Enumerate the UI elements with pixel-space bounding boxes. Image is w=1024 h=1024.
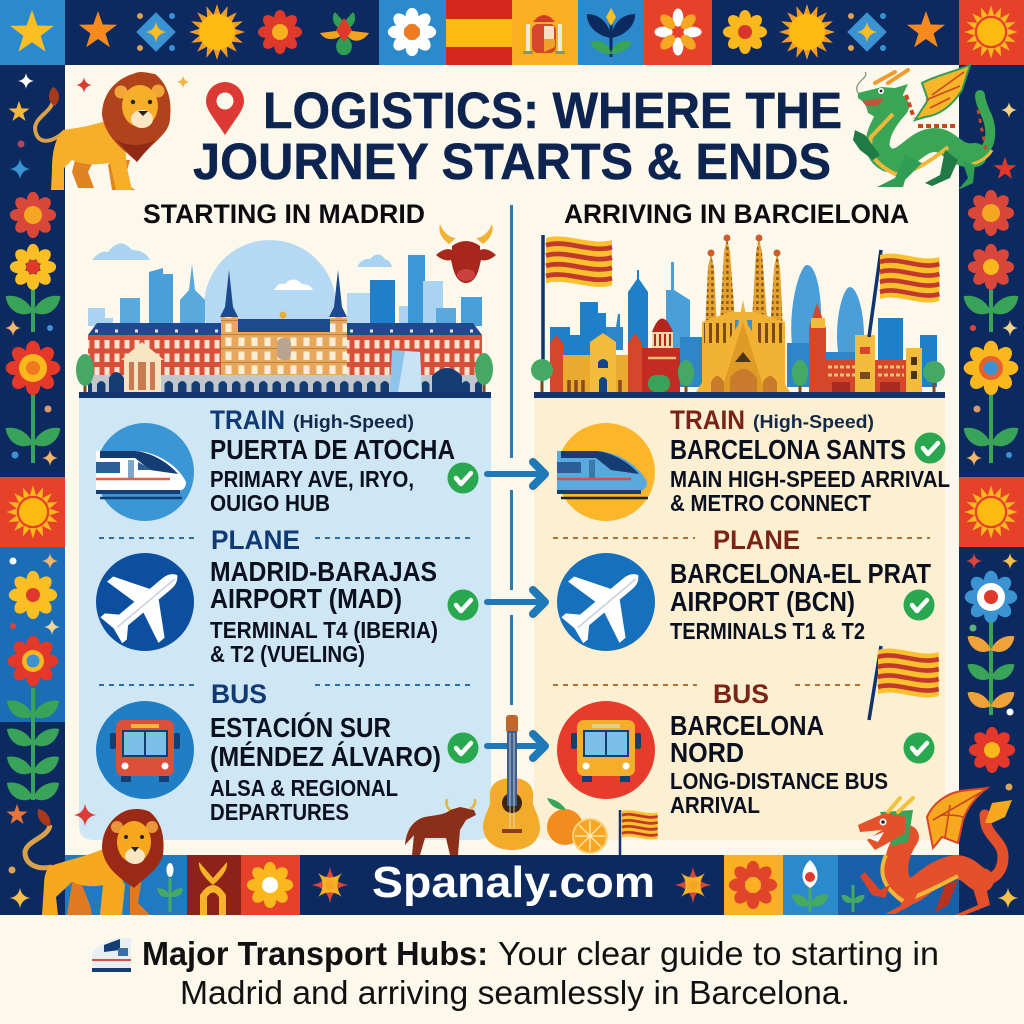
icon: small train in caption	[92, 938, 131, 972]
icon: coat of arms	[523, 15, 565, 54]
text: bus Madrid: (MÉNDEZ ÁLVARO)	[210, 741, 441, 772]
caption	[142, 935, 939, 1011]
text: bus Madrid: BUS	[211, 679, 267, 709]
text: bus Madrid: ALSA & REGIONAL	[210, 775, 398, 801]
text: train Madrid: OUIGO HUB	[210, 490, 330, 516]
plane row: Barcelona	[547, 525, 934, 685]
icon: check	[904, 732, 934, 764]
arrow: train	[487, 462, 545, 486]
text: plane Madrid: MADRID-BARAJAS	[210, 556, 437, 587]
icon: train, blue circle	[96, 423, 194, 521]
caption: Your clear guide to starting in	[498, 935, 939, 972]
text: bus Barcelona: LONG-DISTANCE BUS	[670, 768, 888, 794]
right border column	[959, 65, 1024, 915]
illustration: lion bottom left	[25, 804, 164, 915]
text: plane Madrid	[210, 525, 438, 667]
panel: Barcelona transport background	[534, 397, 945, 840]
text: train Barcelona	[670, 405, 950, 516]
text: train Madrid: (High-Speed)	[293, 412, 414, 432]
bottom border band	[65, 855, 959, 915]
icon: location pin	[206, 82, 244, 135]
heading: starting in Madrid: STARTING IN MADRID	[143, 199, 425, 229]
icon: Catalan flag in panel	[869, 646, 939, 720]
illustration: dragon bottom right	[858, 788, 1012, 915]
icon: check	[448, 590, 478, 620]
illustration: bull	[405, 799, 476, 855]
panel: Madrid transport background	[79, 397, 491, 840]
text: train Barcelona: & METRO CONNECT	[670, 490, 871, 516]
text: train Madrid: PUERTA DE ATOCHA	[210, 434, 455, 465]
illustration: dragon top right	[853, 65, 992, 190]
icon: train, yellow circle	[557, 423, 655, 521]
text: plane Madrid: PLANE	[211, 525, 300, 555]
text: train Madrid: TRAIN	[210, 405, 285, 435]
icon: bull head	[436, 224, 496, 283]
icon: check	[448, 732, 478, 764]
text: plane Barcelona: AIRPORT (BCN)	[670, 586, 855, 617]
bus row: Barcelona	[557, 679, 934, 818]
text: plane Madrid: & T2 (VUELING)	[210, 641, 365, 667]
illustration: Barcelona skyline	[531, 234, 945, 398]
icon: check	[448, 462, 478, 494]
bus row: Madrid	[96, 679, 478, 825]
caption: Madrid and arriving seamlessly in Barcelona.	[180, 974, 850, 1011]
illustration: oranges	[547, 798, 607, 853]
site name: Spanaly.com	[372, 858, 655, 907]
text: bus Barcelona	[670, 679, 888, 818]
title: LOGISTICS: WHERE THE	[263, 82, 842, 139]
text: plane Barcelona: PLANE	[713, 525, 800, 555]
text: bus Madrid	[210, 679, 441, 825]
illustration: Madrid skyline and palace	[76, 240, 493, 398]
arrow: bus	[487, 734, 545, 758]
text: train Madrid: PRIMARY AVE, IRYO,	[210, 466, 414, 492]
arrow: plane	[487, 590, 545, 614]
top border band	[0, 0, 1024, 65]
text: bus Barcelona: NORD	[670, 737, 744, 768]
text: plane Madrid: AIRPORT (MAD)	[210, 583, 402, 614]
text: plane Barcelona	[670, 525, 931, 644]
plane row: Madrid	[86, 525, 478, 685]
text: bus Barcelona: ARRIVAL	[670, 792, 760, 818]
caption: Major Transport Hubs:	[142, 935, 488, 972]
column divider	[510, 205, 513, 705]
icon: bus, blue circle	[96, 701, 194, 799]
text: plane Madrid: TERMINAL T4 (IBERIA)	[210, 617, 438, 643]
illustration: lion top left	[35, 72, 189, 190]
icon: check	[914, 432, 946, 464]
text: train Madrid	[210, 405, 455, 516]
text: train Barcelona: MAIN HIGH-SPEED ARRIVAL	[670, 466, 950, 492]
icon: plane, blue circle	[547, 544, 664, 661]
text: bus Madrid: ESTACIÓN SUR	[210, 712, 391, 743]
train row: Barcelona	[557, 405, 950, 521]
icon: bus, red circle	[557, 701, 655, 799]
title	[193, 82, 842, 190]
icon: check	[904, 590, 934, 620]
text: bus Barcelona: BARCELONA	[670, 710, 824, 741]
title: JOURNEY STARTS & ENDS	[193, 133, 831, 190]
text: train Barcelona: BARCELONA SANTS	[670, 434, 906, 465]
text: train Barcelona: TRAIN	[670, 405, 745, 435]
text: bus Madrid: DEPARTURES	[210, 799, 349, 825]
illustration: small flag	[620, 810, 658, 855]
illustration: guitar	[483, 715, 540, 850]
text: plane Barcelona: TERMINALS T1 & T2	[670, 618, 865, 644]
text: train Barcelona: (High-Speed)	[753, 412, 874, 432]
train row: Madrid	[96, 405, 478, 521]
heading: arriving in Barcelona: ARRIVING IN BARCIELONA	[564, 199, 909, 229]
left border column	[0, 65, 65, 915]
icon: plane, navy circle	[86, 544, 203, 661]
icon: Spanish flag	[446, 0, 512, 65]
text: bus Barcelona: BUS	[713, 679, 769, 709]
text: plane Barcelona: BARCELONA-EL PRAT	[670, 558, 931, 589]
